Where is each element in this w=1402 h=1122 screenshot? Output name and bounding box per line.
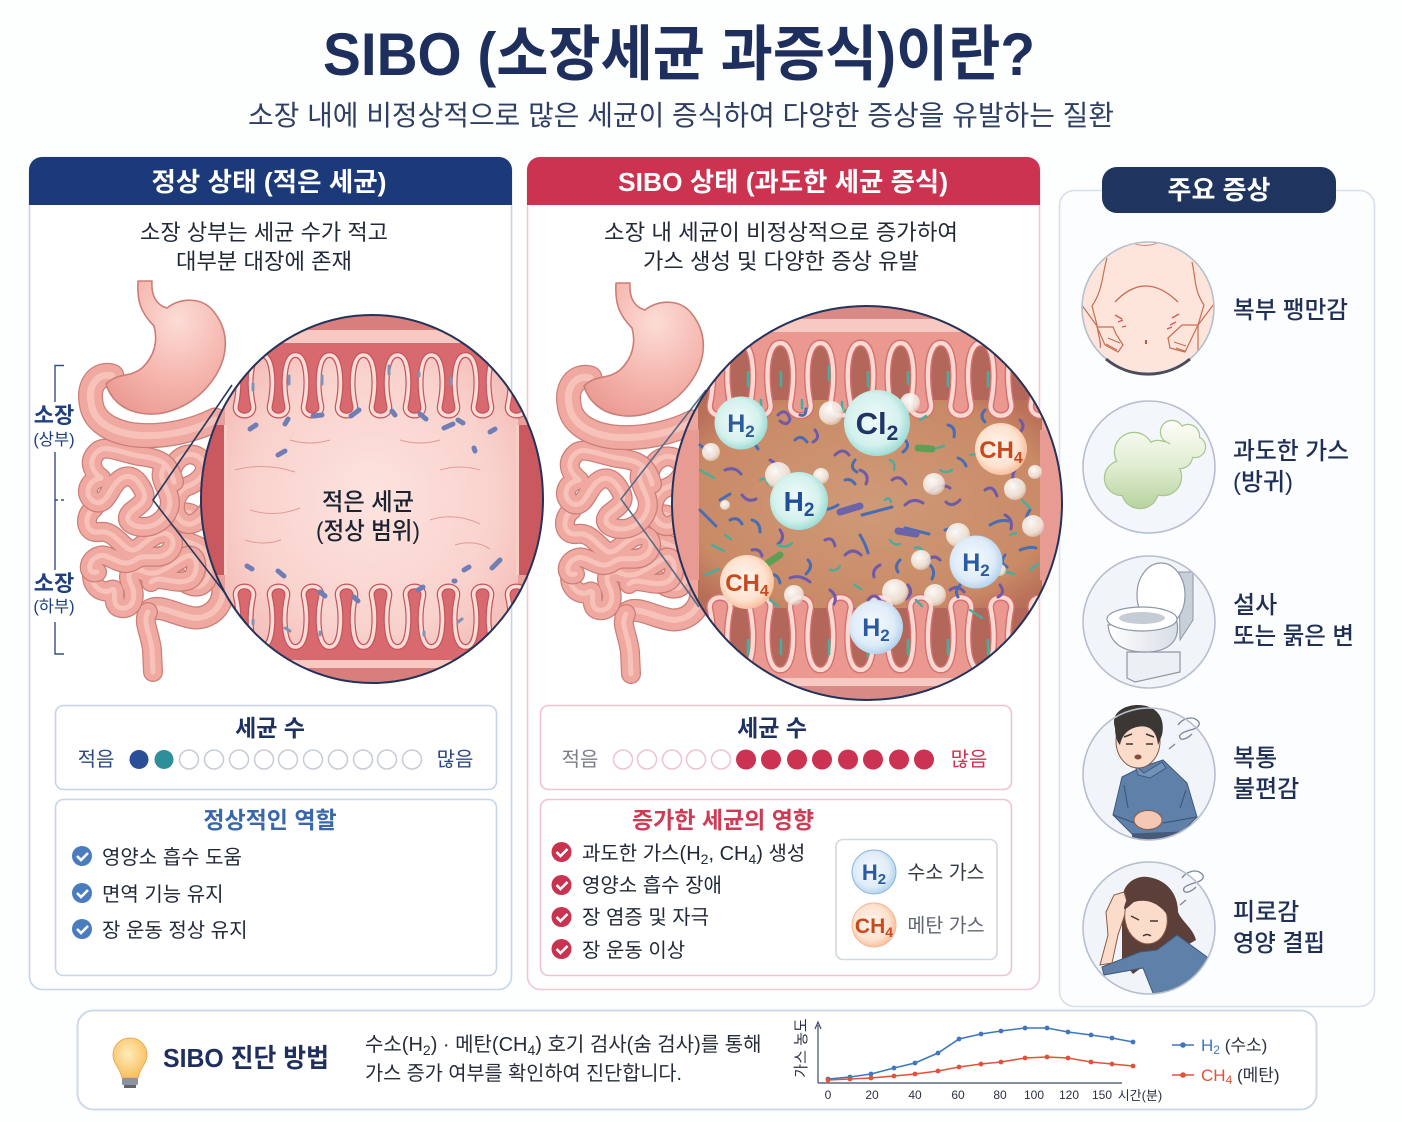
chart legend: (수소) <box>1220 1036 1267 1055</box>
SIBO header <box>527 157 1040 205</box>
symptom text <box>1233 592 1354 650</box>
bacteria count box: normal: 많음 <box>437 748 473 771</box>
symptom text <box>1233 899 1325 957</box>
anatomy: stomach and intestine, SIBO <box>565 283 703 674</box>
diagnosis description: 가스 증가 여부를 확인하여 진단합니다. <box>365 1062 682 1085</box>
magnified circle: bacterial overgrowth <box>670 289 1065 724</box>
x axis labels: 60 <box>951 1088 965 1102</box>
bacteria count box: SIBO: 적음 <box>562 748 598 771</box>
label: lower small intestine: (하부) <box>33 597 75 616</box>
x axis labels: 80 <box>993 1088 1007 1102</box>
gas bubble: H2 centre: H <box>784 486 804 517</box>
gas bubble: H2: 2 <box>745 422 755 441</box>
bacteria swarm <box>700 366 1038 656</box>
chart legend: CH <box>1201 1066 1226 1085</box>
pain squiggle <box>1180 871 1203 905</box>
gas legend: CH <box>855 915 885 938</box>
gas legend: 2 <box>878 871 886 888</box>
gas bubble: CH4 top: 4 <box>1014 450 1023 467</box>
gas legend: 메탄 가스 <box>907 915 985 937</box>
gas bubble: H2 bottom: 2 <box>880 626 890 645</box>
symptom text: 불편감 <box>1233 776 1299 803</box>
icon: toilet <box>1083 556 1215 688</box>
checklist: normal roles: 영양소 흡수 도움 <box>102 846 242 869</box>
gas bubble: CH4 left: CH <box>725 570 760 597</box>
symptom text: 과도한 가스 <box>1233 438 1349 465</box>
gas bubble: H2: H <box>727 410 745 438</box>
SIBO description: 소장 내 세균이 비정상적으로 증가하여 <box>604 220 958 245</box>
y axis label: 가스 농도 <box>793 1018 810 1078</box>
gas bubble: H2 right: H <box>962 549 980 577</box>
symptom text: 복통 <box>1233 745 1277 772</box>
x axis labels: 100 <box>1024 1088 1044 1102</box>
checklist: effects: 장 염증 및 자극 <box>582 906 709 929</box>
H2 series <box>826 1026 1135 1081</box>
normal role box: 정상적인 역할 <box>203 807 337 833</box>
dot scale: high <box>614 750 934 770</box>
symptom text: (방귀) <box>1233 469 1293 496</box>
SIBO description: 가스 생성 및 다양한 증상 유발 <box>643 249 919 274</box>
gas bubble: Cl2: Cl <box>856 406 887 441</box>
normal description: 대부분 대장에 존재 <box>176 249 352 274</box>
symptom text <box>1233 745 1299 803</box>
gas legend: 수소 가스 <box>907 862 985 884</box>
symptom text: 영양 결핍 <box>1233 930 1325 957</box>
bacteria count box: SIBO: 많음 <box>951 748 987 771</box>
label: upper small intestine <box>33 403 75 449</box>
icon: light bulb <box>113 1038 147 1088</box>
diagnosis description: ) 호기 검사(숨 검사)를 통해 <box>535 1033 762 1056</box>
icon: gas cloud <box>1083 401 1215 533</box>
diagnosis description: ) · 메탄(CH <box>431 1033 527 1056</box>
checklist: effects: 4 <box>748 851 756 867</box>
panel: SIBO state <box>527 157 1065 990</box>
bacteria count box: normal <box>56 706 496 790</box>
gas legend: H <box>862 860 878 885</box>
dot scale: low <box>130 750 422 769</box>
x axis labels: 150 <box>1092 1088 1112 1102</box>
normal header <box>29 157 512 205</box>
gas bubble: CH4 top <box>975 423 1027 475</box>
checklist: normal roles: 면역 기능 유지 <box>102 883 224 906</box>
normal description: 소장 상부는 세균 수가 적고 <box>140 220 388 245</box>
caption: few bacteria: (정상 범위) <box>316 518 420 545</box>
SIBO header: SIBO 상태 (과도한 세균 증식) <box>618 167 948 197</box>
SIBO description <box>604 220 958 274</box>
label: lower small intestine <box>33 571 75 616</box>
chart legend: 4 <box>1226 1073 1233 1087</box>
gas bubble: CH4 left <box>720 555 774 609</box>
diagnosis heading: SIBO 진단 방법 <box>163 1043 329 1073</box>
symptom text: 복부 팽만감 <box>1233 297 1348 324</box>
gas bubble: H2 <box>714 396 768 450</box>
x axis labels <box>825 1088 1162 1103</box>
panel: diagnosis <box>78 1010 1316 1110</box>
subtitle: 소장 내에 비정상적으로 많은 세균이 증식하여 다양한 증상을 유발하는 질환 <box>248 100 1114 131</box>
chart axes <box>815 1022 1122 1083</box>
gas bubble: H2 right <box>950 536 1002 588</box>
gas bubble: Cl2 <box>844 390 910 456</box>
normal role box <box>56 800 496 976</box>
checklist: normal roles <box>72 846 247 942</box>
effects box <box>540 800 1012 976</box>
normal header: 정상 상태 (적은 세균) <box>152 167 386 197</box>
chart legend <box>1172 1036 1280 1087</box>
checklist: effects: 영양소 흡수 장애 <box>582 874 722 897</box>
label: upper small intestine: 소장 <box>34 403 74 428</box>
diagnosis description: 수소(H <box>365 1034 423 1056</box>
x axis labels: 시간(분) <box>1118 1088 1162 1103</box>
icon: tired woman <box>1083 862 1215 998</box>
x axis labels: 20 <box>865 1088 879 1102</box>
gas bubble: H2 centre: 2 <box>804 500 814 521</box>
caption: few bacteria <box>316 489 420 545</box>
gas bubble: H2 bottom <box>849 600 903 654</box>
checklist: effects: 2 <box>701 851 709 867</box>
bacteria count box: SIBO: 세균 수 <box>737 715 807 741</box>
title: SIBO (소장세균 과증식)이란? <box>323 21 1035 88</box>
white bubbles <box>702 393 1044 606</box>
icon: man with stomach ache <box>1083 705 1215 850</box>
gas legend <box>836 840 997 960</box>
panel: main symptoms <box>1060 167 1374 1006</box>
chart legend: 2 <box>1213 1043 1220 1057</box>
normal description <box>140 220 388 274</box>
magnified circle: normal bacteria <box>200 310 545 692</box>
label: lower small intestine: 소장 <box>34 571 74 596</box>
bacteria count box: normal: 세균 수 <box>235 715 305 741</box>
checklist: effects: 장 운동 이상 <box>582 939 685 962</box>
gas bubble: H2 bottom: H <box>862 614 880 642</box>
checklist: effects <box>552 842 805 962</box>
diagnosis description: 2 <box>423 1042 431 1058</box>
gas legend: 4 <box>885 924 893 940</box>
gas bubble: CH4 top: CH <box>979 437 1014 464</box>
zoom lines, SIBO <box>621 390 706 607</box>
panel: normal state <box>29 157 545 990</box>
gas bubble: H2 centre <box>770 472 828 530</box>
gas bubble: H2 right: 2 <box>980 561 990 580</box>
x axis labels: 120 <box>1059 1088 1079 1102</box>
icon: bloated abdomen <box>1080 242 1215 374</box>
symptom text <box>1233 438 1349 496</box>
symptoms header pill: 주요 증상 <box>1168 175 1271 205</box>
symptoms header pill <box>1102 167 1336 213</box>
diagnosis description: 4 <box>527 1042 535 1058</box>
symptom text: 또는 묽은 변 <box>1233 623 1354 650</box>
checklist: effects: 과도한 가스(H <box>582 843 701 865</box>
chart legend: H <box>1201 1036 1213 1055</box>
effects box: 증가한 세균의 영향 <box>632 807 814 833</box>
symptom text: 피로감 <box>1233 899 1299 926</box>
symptom text: 설사 <box>1233 592 1277 619</box>
checklist: effects: , CH <box>708 843 748 865</box>
anatomy: stomach and intestine <box>87 281 225 672</box>
zoom lines <box>153 385 232 597</box>
diagnosis description <box>365 1033 762 1085</box>
checklist: normal roles: 장 운동 정상 유지 <box>102 919 247 942</box>
bracket: small intestine regions <box>55 366 64 654</box>
gas bubble: CH4 left: 4 <box>760 583 769 600</box>
line chart: gas concentration over time <box>793 1018 1280 1103</box>
bacteria count box: normal: 적음 <box>78 748 114 771</box>
checklist: effects: ) 생성 <box>756 842 805 865</box>
gas bubble: Cl2: 2 <box>887 422 898 445</box>
caption: few bacteria: 적은 세균 <box>322 489 414 516</box>
x axis labels: 0 <box>825 1088 832 1102</box>
x axis labels: 40 <box>908 1088 922 1102</box>
CH4 series <box>826 1055 1135 1082</box>
chart legend: (메탄) <box>1232 1066 1280 1085</box>
pain squiggle <box>1169 718 1199 749</box>
label: upper small intestine: (상부) <box>33 430 75 449</box>
bacteria count box: SIBO <box>540 706 1012 790</box>
